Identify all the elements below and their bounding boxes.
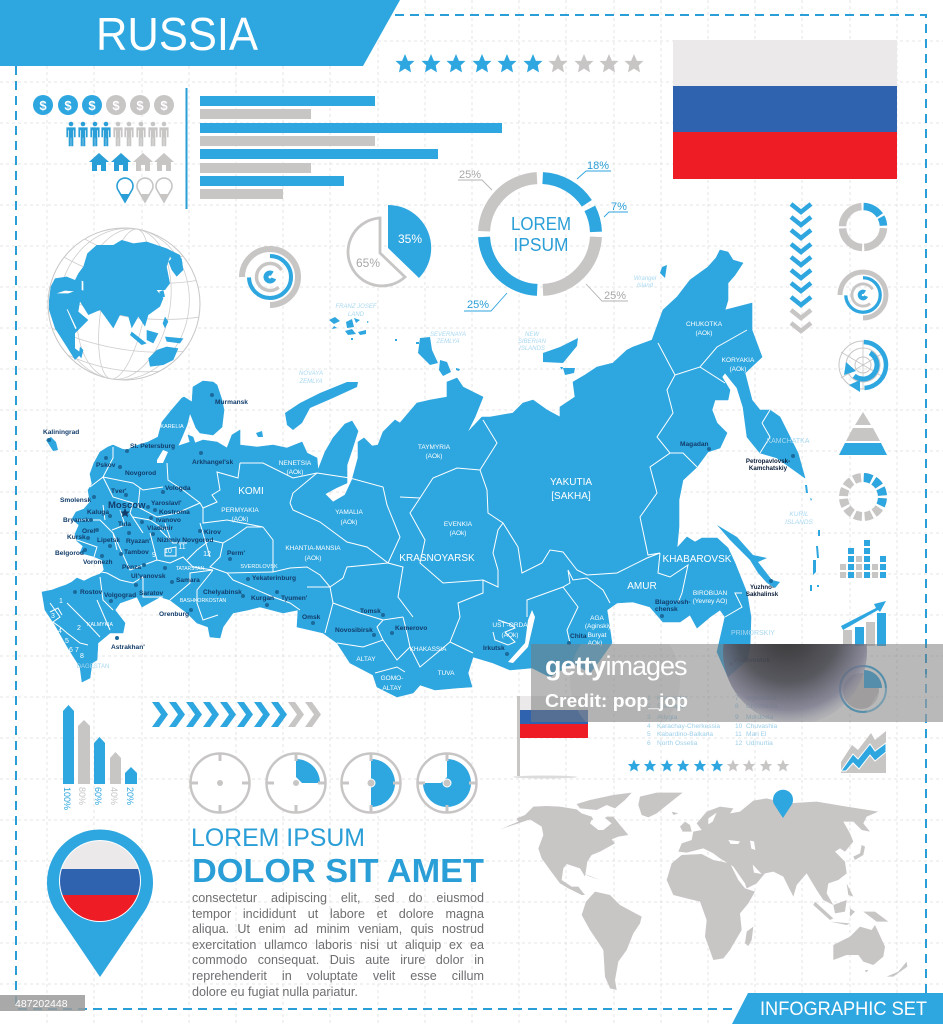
city labels: Vologda [165, 485, 191, 492]
icon: pyramid [839, 412, 887, 455]
icon: dollar coins: $ [88, 98, 96, 113]
icon: location pins [117, 178, 172, 202]
region number legend: Mordovia [746, 714, 773, 721]
city labels: Kemerovo [395, 625, 427, 632]
city labels: Lipetsk [97, 537, 120, 544]
city labels: Novgorod [125, 470, 156, 477]
region number legend: 3 [647, 714, 651, 721]
donut chart: IPSUM [514, 235, 568, 255]
city labels: Tomsk [360, 608, 381, 615]
donut leader labels: 25% [604, 290, 626, 302]
city labels: Yaroslavl' [151, 500, 182, 507]
pale geographic labels [77, 276, 814, 670]
pale geographic labels: Wrangel [634, 276, 657, 282]
icon: ring of segments [842, 476, 884, 518]
headings: LOREM IPSUM [191, 824, 365, 852]
icon: pie [840, 666, 886, 712]
white region labels: (Yevrey AO) [693, 598, 727, 605]
title banner: RUSSIA [96, 8, 258, 60]
city labels: Kaliningrad [43, 429, 79, 436]
region number legend: 10 [735, 723, 743, 730]
city labels: Voronezh [83, 559, 113, 566]
region number legend: Mari El [746, 731, 767, 738]
icon: segmented donut [842, 206, 884, 248]
city labels: Ivanovo [156, 517, 181, 524]
white region labels: ALTAY [382, 685, 402, 692]
city labels: Kursk [67, 534, 86, 541]
mainland Russia [42, 250, 805, 697]
city labels: Moscow [108, 500, 146, 511]
globe [48, 228, 200, 380]
region number legend: 11 [735, 731, 742, 738]
region number legend [647, 695, 778, 747]
pale geographic labels: FRANZ JOSEF [335, 304, 377, 310]
pale geographic labels: NEW [525, 332, 540, 338]
pale geographic labels: LAND [348, 312, 365, 318]
pale geographic labels: ZEMLYA [435, 339, 460, 345]
body copy: dolore eu fugiat nulla pariatur. [192, 985, 358, 999]
donut leader labels: 25% [459, 169, 481, 181]
white region labels: (AOk) [502, 632, 518, 639]
vertical bar chart with percentages: 20% [125, 787, 135, 805]
donut leader labels: 25% [467, 299, 489, 311]
pale geographic labels: ZEMLYA [298, 379, 323, 385]
donut leader labels: 7% [611, 201, 627, 213]
city labels: Samara [176, 577, 200, 584]
white region labels: (AOk) [450, 530, 466, 537]
white region labels: TUVA [438, 670, 455, 677]
icon: dollar coins: $ [160, 98, 168, 113]
region number legend: North Ossetia [657, 740, 698, 747]
region number legend: Stavropol [657, 703, 685, 710]
star rating top [396, 54, 644, 72]
white region labels: 6 [69, 647, 73, 654]
white region labels: 8 [80, 653, 84, 660]
body copy: tempor incididunt ut labore et dolore magna [192, 907, 484, 921]
region number legend: 6 [647, 740, 651, 747]
body copy: exercitation ullamco laboris nisi ut aliquip ex ea [192, 938, 484, 952]
region number legend: Chechenia [746, 703, 778, 710]
white region labels [51, 321, 755, 692]
star: Moscow [120, 508, 130, 517]
lakes: Baikal, Ladoga [157, 450, 535, 663]
city labels: Kurgan [251, 595, 274, 602]
city labels: Astrakhan' [111, 644, 145, 651]
icon: dollar coins: $ [112, 98, 120, 113]
white region labels: AOk) [588, 640, 602, 647]
body copy: consectetur adipiscing elit, sed do eiusmod [192, 891, 484, 905]
icon: dollar coins: $ [136, 98, 144, 113]
white region labels: KRASNOYARSK [399, 553, 475, 564]
vertical bar chart with percentages: 60% [93, 787, 103, 805]
pale geographic labels: ISLANDS [519, 346, 545, 352]
icon: dollar coins: $ [39, 98, 47, 113]
icon: dollar coins [33, 95, 174, 115]
pale geographic labels: PRIMORSKIY [731, 630, 775, 637]
arctic islands [256, 265, 667, 437]
pale geographic labels: SIBERIAN [518, 339, 547, 345]
Kaliningrad exclave [46, 437, 58, 451]
city labels: chensk [655, 606, 678, 613]
white region labels: AMUR [627, 581, 657, 592]
white region labels: (AOk) [696, 330, 712, 337]
icon: spiral gauge small [840, 272, 886, 318]
white region labels: BASHKORKOSTAN [180, 598, 226, 604]
region number legend: Kabardino-Balkaria [657, 731, 713, 738]
city labels: Chelyabinsk [203, 589, 242, 596]
city labels: Ryazan' [126, 538, 151, 545]
city labels: Nizhniy Novgorod [157, 537, 213, 544]
gauge quarter [266, 754, 326, 812]
gauge empty [190, 754, 250, 812]
stock image id tag: 487202448 [15, 998, 68, 1010]
pale geographic labels: SEVERNAYA [430, 332, 466, 338]
city labels: Rostov [80, 589, 103, 596]
icon: area chart [841, 731, 886, 773]
white region labels: (AOk) [305, 555, 321, 562]
white region labels: NENETSIA [279, 460, 312, 467]
donut leader labels [458, 160, 628, 311]
city labels: Magadan [680, 441, 709, 448]
white region labels: (AOk) [730, 366, 746, 373]
white region labels: KHABAROVSK [663, 554, 732, 565]
donut chart: LOREM [511, 214, 571, 234]
icon: people [66, 122, 169, 146]
footer banner [732, 993, 943, 1024]
white region labels: KORYAKIA [722, 357, 755, 364]
watermark band [531, 644, 943, 722]
region number legend: 12 [735, 740, 743, 747]
Sakhalin [717, 525, 780, 588]
star rating lower [628, 760, 789, 771]
small flag on pole [513, 696, 588, 778]
city labels: Sakhalinsk [746, 591, 779, 598]
body copy: commodo consequat. Duis aute irure dolor in [192, 953, 484, 967]
white region labels: YAKUTIA [550, 477, 592, 488]
city labels: Chita [570, 633, 587, 640]
white region labels: 3 [51, 613, 55, 620]
region number legend: Karachay-Cherkessia [657, 723, 720, 730]
flag of Russia [673, 40, 897, 179]
city labels: Kirov [204, 529, 221, 536]
vertical bar chart with percentages: 100% [62, 787, 72, 810]
white region labels: 10 [164, 548, 172, 555]
pale geographic labels: NOVAYA [299, 371, 323, 377]
white region labels: GOMO- [381, 675, 403, 682]
white region labels: AGA [590, 615, 605, 622]
footer banner: INFOGRAPHIC SET [760, 999, 927, 1020]
region number legend: Krasnodar [657, 695, 688, 702]
city labels: Ul'yanovsk [131, 573, 166, 580]
horizontal arrows [152, 702, 321, 727]
city labels: Saratov [139, 590, 164, 597]
city labels: Bryansk [63, 517, 89, 524]
city labels: Kostroma [159, 509, 190, 516]
white region labels: 11 [178, 544, 186, 551]
white region labels: (Aginskiy [585, 623, 612, 630]
pale geographic labels: Island [637, 283, 654, 289]
body copy: aliqua. Ut enim ad minim veniam, quis nostrud [192, 922, 484, 936]
continent: Eurasia and Africa [49, 240, 183, 367]
pale geographic labels: KURIL [789, 511, 809, 518]
white region labels: YAMALIA [335, 509, 364, 516]
white region labels: (AOk) [426, 453, 442, 460]
city labels [43, 399, 790, 664]
white region labels: (AOk) [341, 519, 357, 526]
region borders [50, 330, 770, 673]
city labels: Arkhangel'sk [192, 459, 233, 466]
Kuril Islands [805, 485, 820, 591]
pie chart 65/35: 65% [356, 256, 380, 270]
white region labels: 7 [75, 647, 79, 654]
region number legend: 7 [735, 695, 739, 702]
pale geographic labels: ISLANDS [785, 519, 814, 526]
white region labels: (AOk) [287, 469, 303, 476]
large flag pin [47, 829, 153, 977]
stock image id tag [0, 995, 85, 1011]
white region labels: ALTAY [356, 656, 376, 663]
gauge three quarters [418, 754, 476, 812]
pale geographic labels: KAMCHATKA [766, 438, 810, 445]
white region labels: KOMI [238, 486, 264, 497]
city labels: Murmansk [215, 399, 248, 406]
region number legend: 1 [647, 695, 651, 702]
icon column [839, 206, 887, 773]
islands of Asia-Pacific and Australia [79, 257, 183, 367]
city labels: Tver' [111, 488, 127, 495]
region number legend: 5 [647, 731, 651, 738]
city labels: Pskov [96, 462, 116, 469]
gauge half [342, 754, 400, 812]
white region labels: BIROBIJAN [693, 590, 727, 597]
city labels: Vladimir [147, 525, 173, 532]
city labels: Orel [82, 528, 95, 535]
vertical bar chart with percentages [62, 705, 137, 810]
white region labels: 4 [58, 628, 62, 635]
city labels: Smolensk [60, 497, 91, 504]
city labels: Blagovesh- [655, 599, 691, 606]
donut leader labels: 18% [587, 160, 609, 172]
map of Russia [42, 250, 820, 697]
region number legend: 2 [647, 703, 651, 710]
city dots [47, 393, 795, 666]
white region labels: CHUKOTKA [686, 321, 723, 328]
city labels: Tyumen' [281, 595, 308, 602]
white region labels: 9 [152, 552, 156, 559]
region number legend: Udmurtia [746, 740, 773, 747]
watermark band: Credit: pop_jop [545, 691, 688, 711]
white region labels: SVERDLOVSK [240, 564, 278, 570]
city labels: Belgorod [55, 550, 84, 557]
clock gauges [190, 754, 476, 812]
white region labels: KARELIA [160, 424, 184, 430]
white region labels: 12 [203, 551, 211, 558]
horizontal bar chart [186, 88, 502, 209]
pie chart 65/35 [348, 205, 431, 286]
city labels: Novosibirsk [335, 627, 373, 634]
city labels: Volgograd [104, 592, 136, 599]
white region labels: KALMYKIA [87, 622, 114, 628]
icon: map marker on world map [773, 790, 793, 818]
pale geographic labels: DAGESTAN [77, 664, 109, 670]
body copy [192, 891, 484, 999]
white region labels: PERMYAKIA [221, 507, 259, 514]
pictogram panel [33, 95, 174, 202]
title banner [0, 0, 400, 66]
city labels: Orenburg [159, 611, 189, 618]
region number legend: Adygia [657, 714, 677, 721]
city labels: Yuzhno- [750, 584, 774, 591]
city labels: Perm' [227, 550, 245, 557]
icon: growth chart [841, 601, 886, 646]
white region labels: 1 [59, 598, 63, 605]
vertical bar chart with percentages: 40% [109, 787, 119, 805]
white region labels: TATARSTAN [176, 566, 205, 572]
white region labels: KHAKASSIA [410, 646, 447, 653]
city labels: Yekaterinburg [252, 575, 296, 582]
icon: radar with arrows [839, 341, 887, 392]
white region labels: UST'-ORDA [492, 622, 528, 629]
white region labels: EVENKIA [444, 521, 473, 528]
city labels: Vladivostok [733, 657, 770, 664]
white region labels: [SAKHA] [551, 491, 591, 502]
icon: dollar coins: $ [64, 98, 72, 113]
city labels: Penza [122, 564, 141, 571]
white region labels: 2 [77, 625, 81, 632]
region number legend: 8 [735, 703, 739, 710]
pie chart 65/35: 35% [398, 232, 422, 246]
region number legend: Chuvashia [746, 723, 777, 730]
icon: houses [89, 153, 174, 171]
white region labels: TAYMYRIA [418, 444, 451, 451]
region number legend: 4 [647, 723, 651, 730]
watermark band: gettyimages [545, 651, 687, 681]
city labels: Kamchatskiy [749, 465, 788, 472]
donut chart [458, 160, 628, 311]
headings [191, 824, 484, 889]
white region labels: Buryat [588, 632, 607, 639]
body copy: reprehenderit in voluptate velit esse cillum [192, 969, 484, 983]
white region labels: KHANTIA-MANSIA [285, 545, 341, 552]
world map [500, 793, 907, 990]
headings: DOLOR SIT AMET [192, 852, 484, 889]
city labels: Petropavlovsk- [746, 458, 790, 465]
city labels: Omsk [302, 614, 321, 621]
city labels: Tambov [124, 549, 149, 556]
vertical chevrons [791, 204, 811, 331]
city labels: Kaluga [87, 509, 109, 516]
region number legend: 9 [735, 714, 739, 721]
white region labels: 5 [65, 638, 69, 645]
white region labels: (AOk) [232, 516, 248, 523]
icon: block bar chart [840, 540, 886, 578]
city labels: Tula [118, 521, 131, 528]
region number legend: Ingushetia [746, 695, 777, 702]
spiral gauge icon [242, 249, 298, 305]
city labels: Irkutsk [483, 645, 505, 652]
city labels: St. Petersburg [130, 443, 175, 450]
vertical bar chart with percentages: 80% [77, 787, 87, 805]
